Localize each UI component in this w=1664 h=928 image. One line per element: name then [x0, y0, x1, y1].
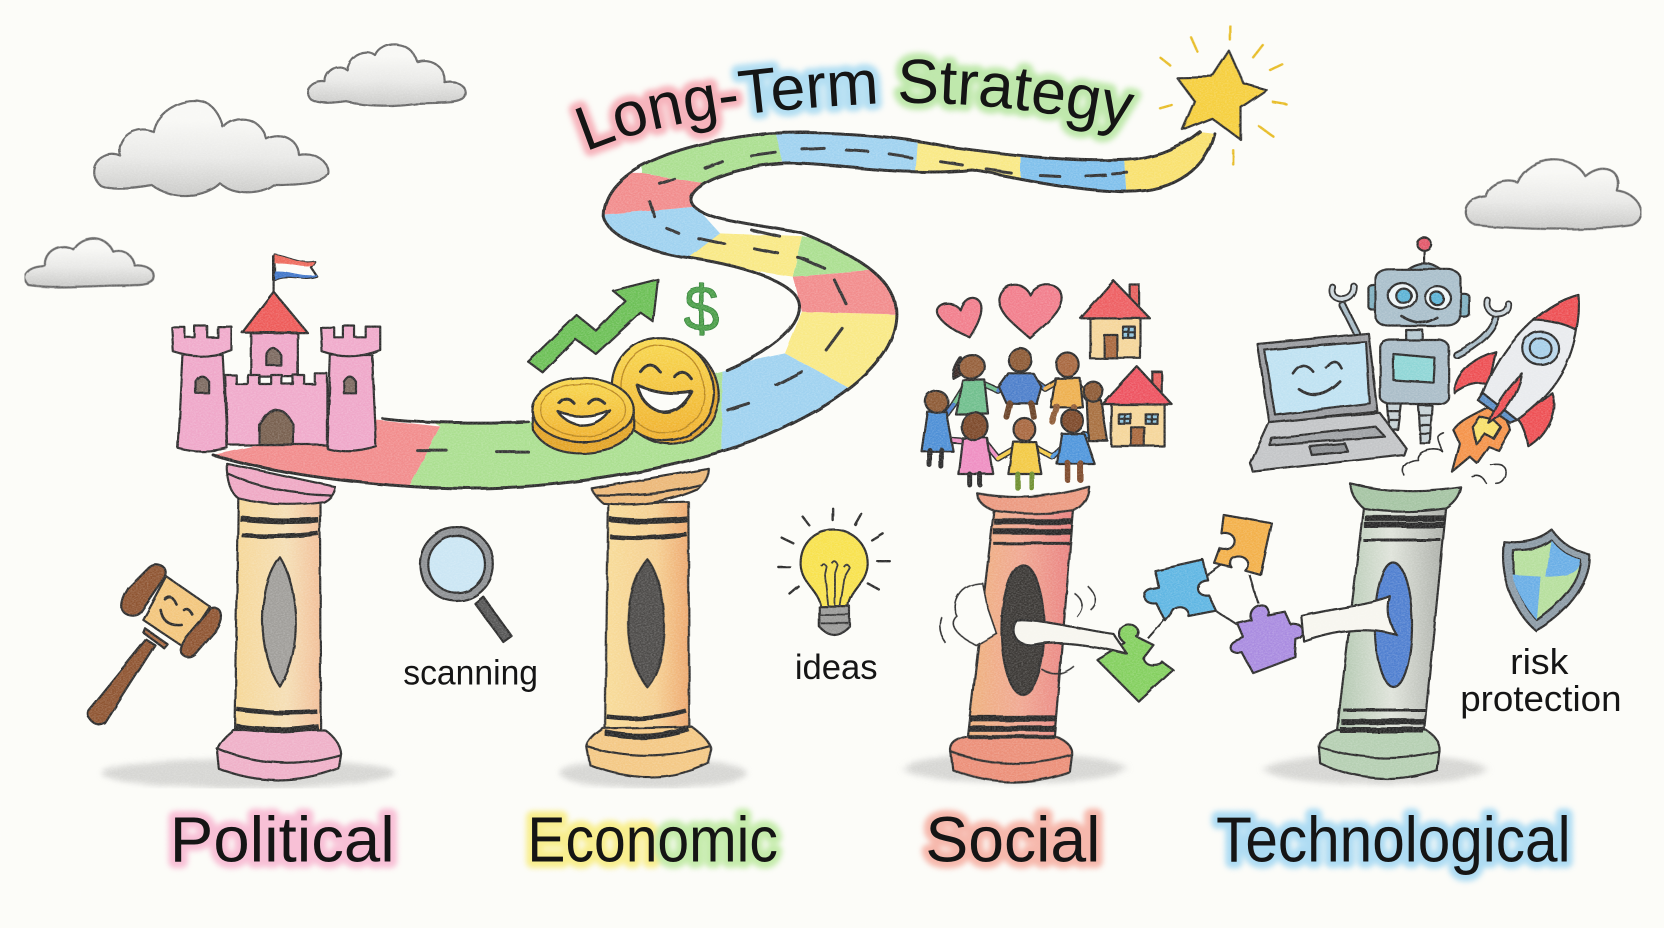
- cloud: small top: [308, 44, 466, 106]
- coin: large smiling: [607, 335, 724, 447]
- arms colour: [944, 380, 1095, 458]
- rocket exhaust: [1403, 407, 1510, 483]
- pillar: economic: [560, 468, 747, 788]
- label: Social: Social: [925, 805, 1100, 876]
- puzzle piece: purple: [1230, 605, 1303, 673]
- central keep: [225, 292, 327, 445]
- label: Political: Political: [170, 805, 395, 876]
- person: blue left: [922, 391, 953, 467]
- impact squiggles: social: [940, 583, 1096, 674]
- growth arrow: [528, 279, 658, 372]
- puzzle piece: green: [1097, 624, 1173, 702]
- shield: [1503, 530, 1590, 631]
- illustration: [25, 26, 1641, 788]
- person: blue back: [999, 348, 1041, 417]
- coin: small smiling: [532, 378, 634, 453]
- label: scanning: scanning: [403, 653, 538, 692]
- house: lower: [1103, 367, 1172, 446]
- gavel: [88, 565, 221, 725]
- rocket: [1403, 295, 1579, 483]
- puzzle piece: orange: [1215, 515, 1272, 575]
- pillar: social: [905, 487, 1125, 783]
- label: risk protection: protection: [1460, 678, 1622, 719]
- robot legs: [1387, 403, 1432, 443]
- people holding hands: [922, 348, 1107, 488]
- road outline: [213, 132, 1214, 488]
- label: risk protection: [1460, 641, 1622, 719]
- right tower: [321, 326, 380, 451]
- laptop: [1250, 333, 1406, 472]
- robot head: [1375, 269, 1460, 326]
- cloud: right: [1466, 160, 1641, 229]
- label: ideas: ideas: [795, 648, 878, 687]
- left tower: [172, 326, 231, 452]
- beam: left: [1013, 620, 1127, 654]
- label: Economic: Economic: [527, 805, 778, 876]
- title: Long-Term Strategy: Long-Term Strategy: [576, 59, 1135, 150]
- arms outline: [944, 380, 1095, 458]
- person: pink: [958, 413, 993, 485]
- label: Political: Political: [170, 805, 395, 876]
- person: green: [953, 355, 989, 414]
- robot: [1332, 238, 1509, 443]
- title: Long-Term Strategy: Long-Term Strategy: [566, 50, 1144, 159]
- person: brown side: [1084, 382, 1107, 441]
- puzzle piece: blue: [1145, 560, 1216, 621]
- flag: [274, 255, 317, 293]
- road center dashes: [418, 148, 1127, 452]
- dollar sign: $: [684, 274, 719, 345]
- pillar: technological: [1265, 483, 1485, 784]
- beam: right: [1302, 597, 1397, 642]
- cloud: large upper left: [94, 101, 328, 196]
- star with sparkle rays: [1160, 26, 1286, 165]
- label: Social: Social: [925, 805, 1100, 876]
- house: upper: [1081, 281, 1150, 358]
- label: Technological: Technological: [1216, 805, 1571, 876]
- label: Economic: Economic: [527, 805, 778, 876]
- label: risk protection: risk: [1510, 641, 1569, 682]
- magnifying glass: [420, 528, 512, 642]
- castle: [172, 255, 380, 452]
- person: yellow: [1008, 418, 1041, 488]
- road: [212, 130, 1216, 490]
- label: Technological: Technological: [1216, 805, 1571, 876]
- puzzle connectors: [1148, 565, 1258, 638]
- robot torso: [1380, 330, 1449, 404]
- hearts: [937, 285, 1062, 338]
- person: blue right: [1057, 409, 1095, 480]
- antenna and ears: [1368, 238, 1469, 317]
- pillar: political: [102, 463, 395, 788]
- cloud: small left: [25, 238, 154, 287]
- robot arms: [1332, 287, 1509, 355]
- light bulb: [778, 508, 889, 635]
- person: orange: [1051, 353, 1083, 422]
